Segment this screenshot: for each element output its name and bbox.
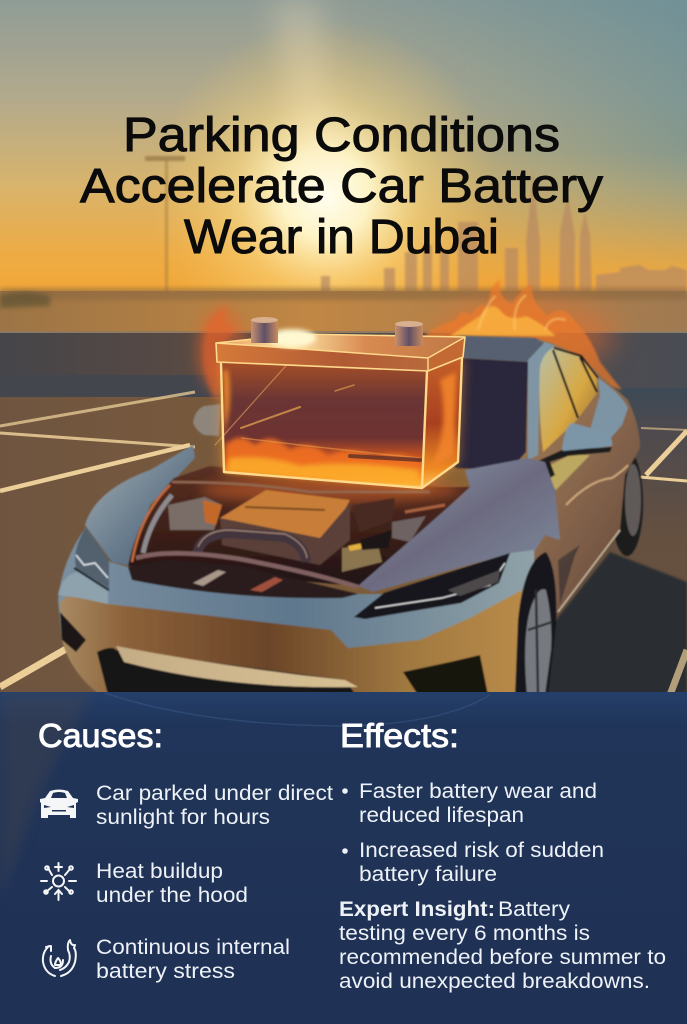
left battery terminal [251,317,278,343]
effect 1 [342,779,597,827]
side face [422,358,462,488]
bright bumper strip [116,646,358,687]
sun flare on battery [268,329,316,347]
transparent glowing battery [215,317,465,489]
left wing mirror [193,404,221,436]
expert insight text: Expert Insight: [339,897,495,921]
title: Wear in Dubai [184,211,499,264]
windshield reflections inside battery [215,350,420,460]
right wing mirror [535,423,612,487]
fluid reservoir [168,497,222,530]
cause 2 text: under the hood [96,883,248,907]
left fender [85,445,195,566]
lower hood slot [128,560,358,598]
engine cover [220,490,350,540]
effect 1: reduced lifespan [359,803,524,827]
car [58,335,643,695]
cause 1 text: Car parked under direct [96,781,333,805]
battery outline [216,334,465,488]
front right wheel [515,552,556,695]
asphalt parking lot [0,375,687,695]
ground band [0,288,687,333]
effects heading: Effects: [340,717,459,754]
causes heading: Causes: [38,717,163,754]
bumper with amber reflection [60,585,522,695]
information panel [0,692,687,1024]
title: Accelerate Car Battery [80,160,603,213]
causes column [38,717,333,983]
engine bay opening [128,466,470,586]
expert insight text: Battery [498,897,570,921]
intake pipe [198,533,306,562]
icon: stress flame cycle [43,940,76,976]
light pole [145,156,185,300]
icon: heat sun [41,863,76,900]
left headlight [74,527,109,590]
roof and side body [455,335,640,640]
effects column [339,717,666,993]
effect 1: Faster battery wear and [359,779,597,803]
lower black grille [97,648,356,695]
effect 2: battery failure [359,862,497,886]
hood lip [136,553,358,587]
expert insight text: testing every 6 months is [339,921,590,945]
cause 2 text: Heat buildup [96,859,223,883]
windshield [455,358,528,470]
rear wheel [611,450,643,556]
icon: car [40,790,78,818]
cause 3 text: Continuous internal [96,935,290,959]
expert insight text: recommended before summer to [339,945,666,969]
parking lines [0,392,687,695]
front fascia: blue upper band [58,527,534,695]
inner flames [223,370,456,486]
right lower vent [403,655,488,695]
right headlight [354,553,510,619]
left air intake [60,612,86,652]
effect 2: Increased risk of sudden [359,838,604,862]
front face [221,363,427,488]
mesh filter [392,516,426,542]
battery lid [216,334,465,371]
flames behind the car [196,280,622,398]
cause 3 text: battery stress [96,959,235,983]
cause 1 text: sunlight for hours [96,805,270,829]
bumper highlight [58,572,108,604]
small fuse box [342,544,382,572]
effect 2 [342,838,604,886]
right hood panel and fender [358,458,560,592]
outer glow [220,358,463,489]
side window [539,348,598,452]
right battery terminal [395,321,423,346]
title: Parking Conditions [123,109,560,162]
reflections [405,505,445,512]
Dubai skyline silhouette [321,170,687,293]
background: sunset sky [0,0,687,300]
low wall [0,331,687,389]
expert insight text: avoid unexpected breakdowns. [339,969,650,993]
